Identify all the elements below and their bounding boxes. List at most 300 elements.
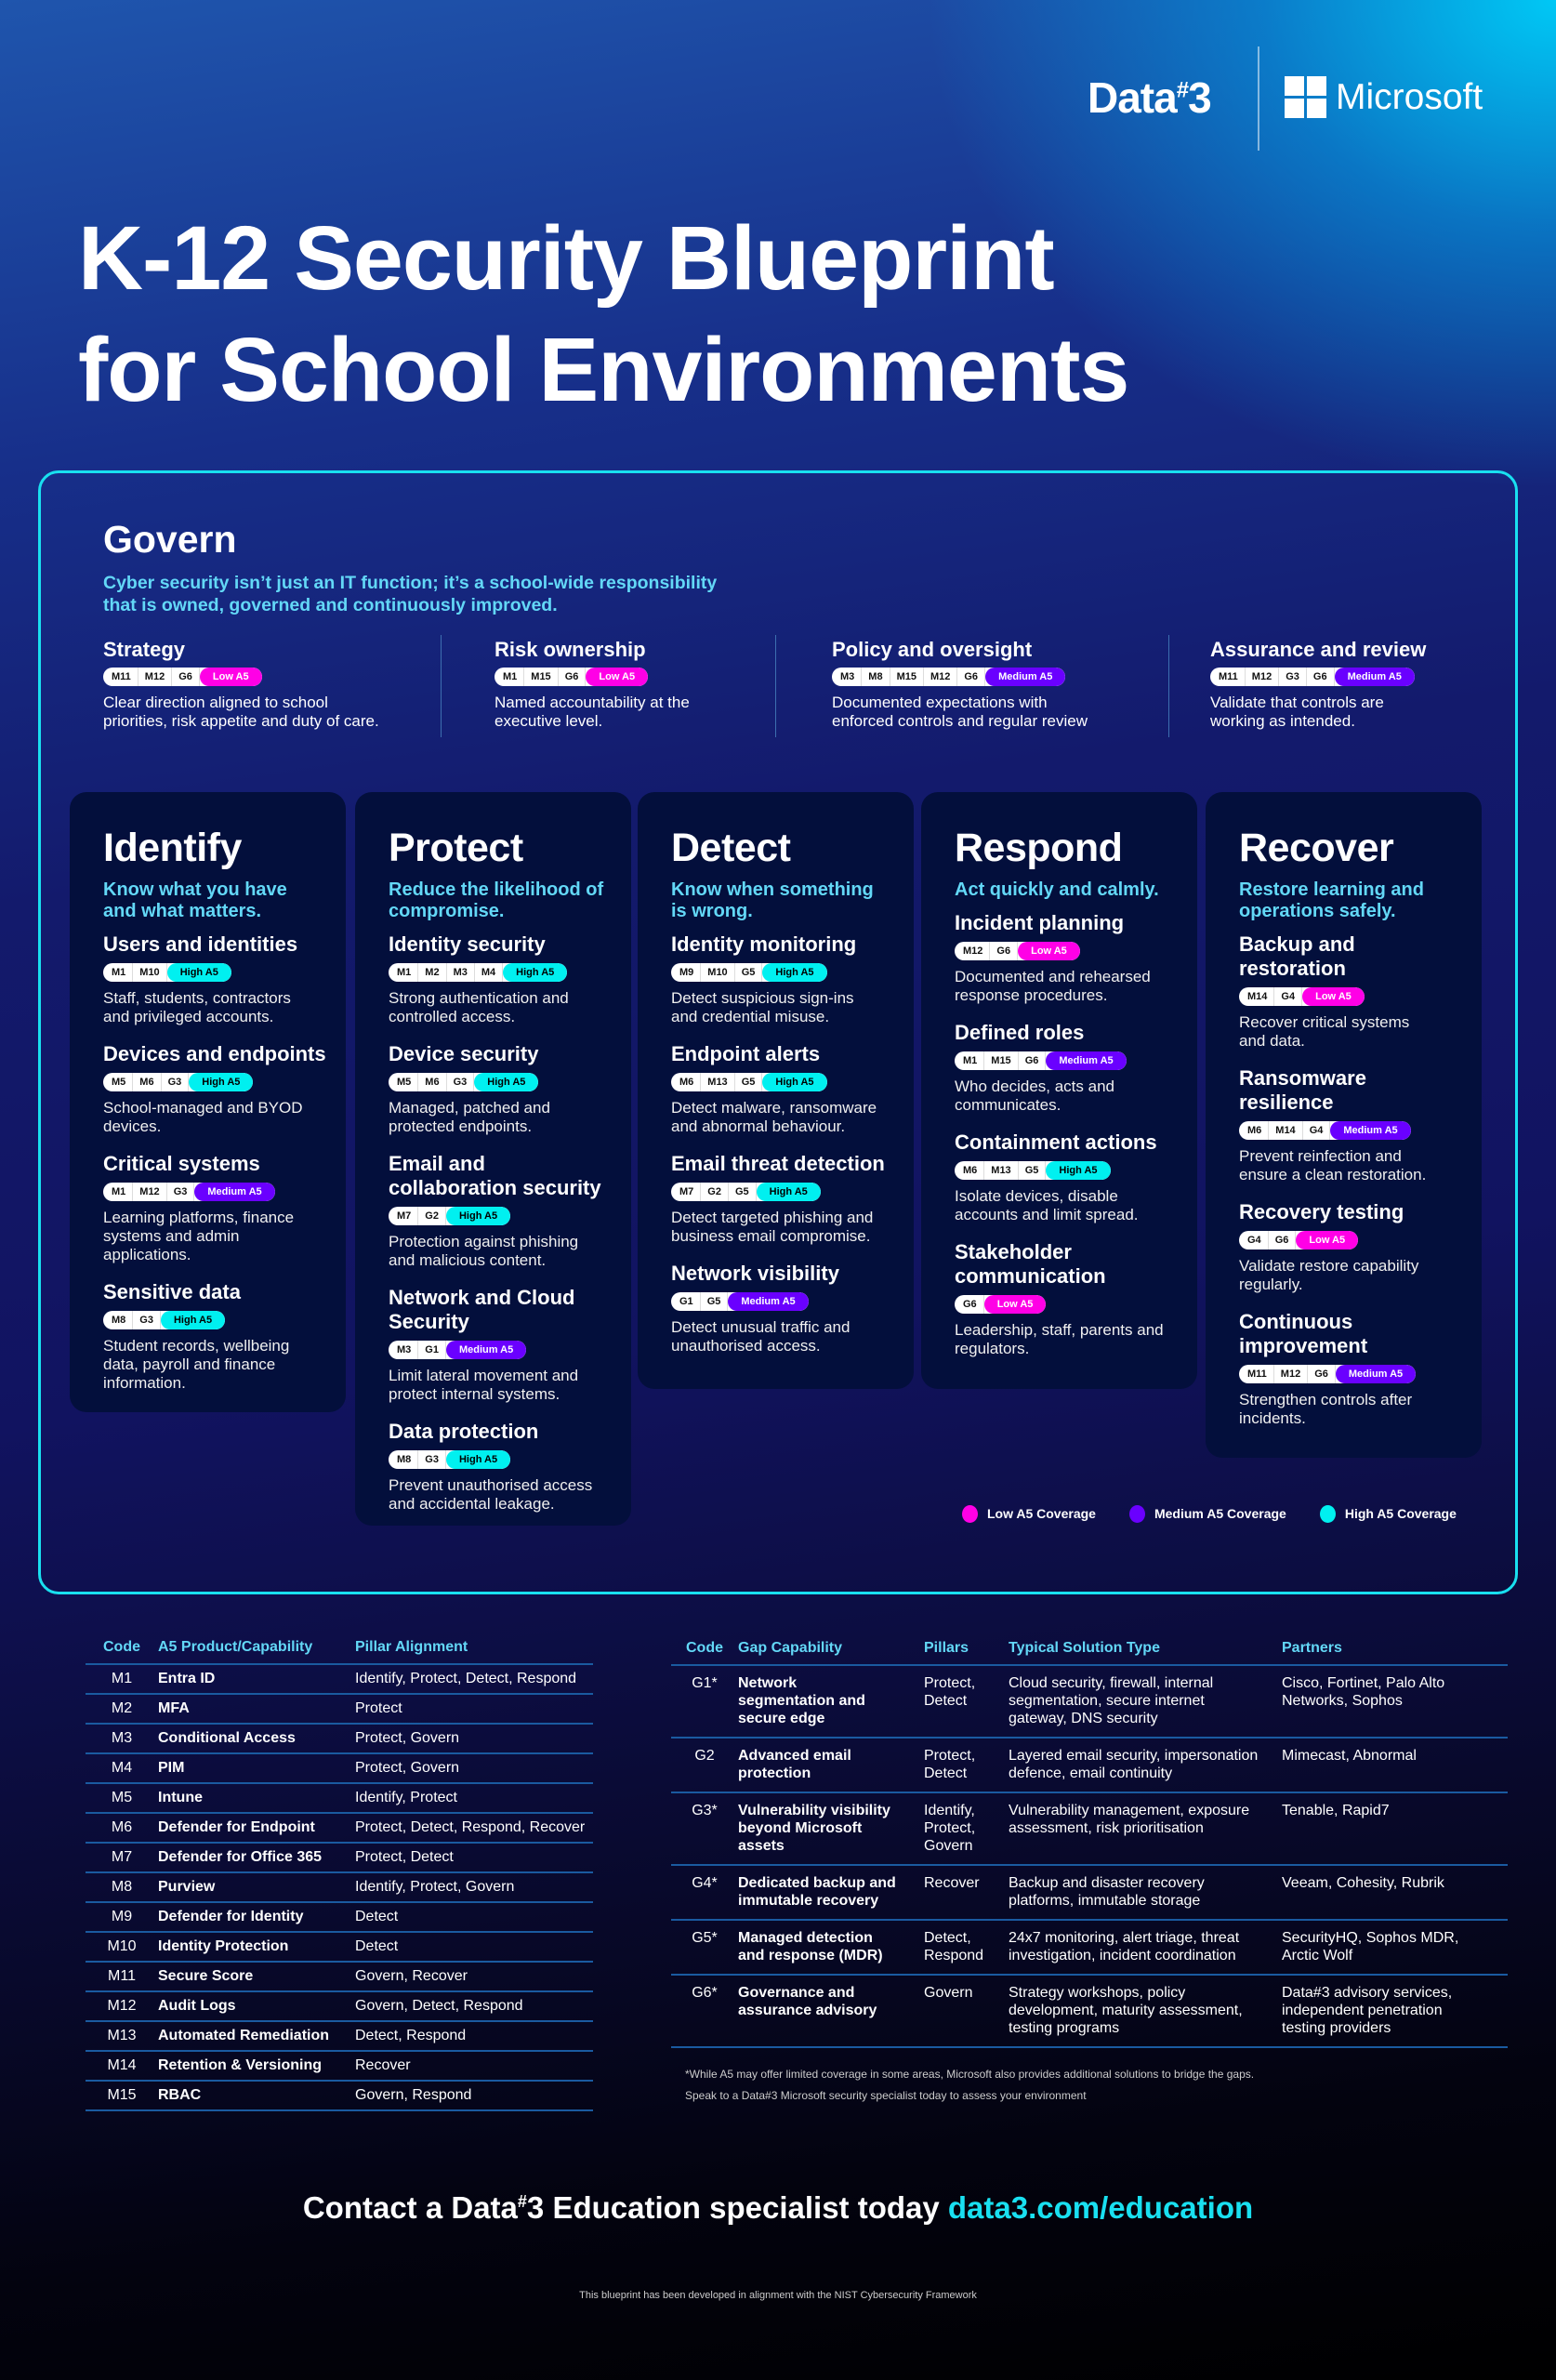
item: Defined roles: M1 [963,1055,977,1066]
item: Data protection: M8 [397,1454,411,1465]
govern item: Assurance and review: G6 [1313,671,1327,682]
item: Identity monitoring: High A5 [775,967,814,978]
item: Email and collaboration security: collaboration security [389,1176,601,1199]
table: gap capabilities: Protect, [924,1675,975,1691]
item: Continuous improvement: Strengthen controls after [1239,1391,1412,1408]
table: A5 products: M12 [107,1998,137,2014]
main panel [38,470,1518,1594]
item: Stakeholder communication: communication [955,1264,1106,1288]
item: Continuous improvement: M11 [1247,1368,1267,1380]
table: gap capabilities: Mimecast, Abnormal [1282,1748,1417,1764]
table: A5 products: Automated Remediation [158,2028,329,2043]
title [78,207,1128,420]
table: gap capabilities: Advanced email [738,1748,851,1764]
item: Email threat detection: G5 [735,1186,749,1197]
item: Data protection: High A5 [459,1454,497,1465]
govern item: Strategy: Strategy [103,638,185,661]
table: gap capabilities: G4* [692,1875,718,1891]
table: A5 products: M11 [108,1968,136,1984]
item: Incident planning [955,911,1151,1004]
item: Stakeholder communication: Low A5 [997,1299,1033,1310]
item: Identity monitoring: Identity monitoring [671,932,856,956]
item: Endpoint alerts: Detect malware, ransomware [671,1099,877,1117]
table: A5 products: M1 [112,1671,132,1686]
item: Containment actions: High A5 [1059,1165,1098,1176]
govern item: Policy and oversight: Documented expectations with [832,694,1048,711]
item: Defined roles [955,1021,1127,1114]
item: Critical systems: M1 [112,1186,125,1197]
table: A5 products: M7 [112,1849,132,1865]
item: Network visibility: Network visibility [671,1262,839,1285]
item: Devices and endpoints: devices. [103,1117,161,1135]
panel: Govern [103,518,718,615]
table: gap capabilities: Gap Capability [738,1640,842,1656]
table: A5 products: Identify, Protect, Govern [355,1879,514,1895]
item: Ransomware resilience: G4 [1310,1125,1323,1136]
item: Containment actions: accounts and limit spread. [955,1206,1138,1223]
item: Incident planning: Documented and rehearsed [955,968,1151,985]
panel: Detect: Know when something [671,879,874,900]
item: Sensitive data: M8 [112,1315,125,1326]
table: gap capabilities: Managed detection [738,1930,873,1946]
table: gap capabilities: Veeam, Cohesity, Rubrik [1282,1875,1444,1891]
table: gap capabilities: independent penetration [1282,2003,1443,2018]
table: A5 products: A5 Product/Capability [158,1639,312,1655]
item: Ransomware resilience: resilience [1239,1091,1334,1114]
footnote: *While A5 may offer limited coverage in some areas, Microsoft also provides additional solutions to bridge the gaps. [685,2068,1254,2081]
table: gap capabilities: testing programs [1009,2020,1119,2036]
panel: Detect [638,792,914,1389]
table: gap capabilities: Tenable, Rapid7 [1282,1803,1390,1818]
item: Users and identities: M10 [139,967,160,978]
item: Defined roles: Who decides, acts and [955,1078,1114,1095]
govern item: Assurance and review: Validate that controls are [1210,694,1384,711]
item: Network and Cloud Security: Network and Cloud [389,1286,574,1309]
item: Network and Cloud Security: Limit lateral movement and [389,1367,578,1384]
item: Email and collaboration security: M7 [397,1210,411,1222]
item: Backup and restoration: Backup and [1239,932,1355,956]
govern item: Strategy: M11 [112,671,131,682]
panel: Identify [70,792,346,1412]
item: Identity security: High A5 [516,967,554,978]
heading: Govern: Govern [103,518,237,561]
govern item: Assurance and review [1210,638,1426,730]
table: gap capabilities: Data#3 advisory services, [1282,1985,1452,2001]
item: Backup and restoration [1239,932,1409,1050]
table: gap capabilities: Governance and [738,1985,854,2001]
item: Continuous improvement [1239,1310,1416,1427]
item: Users and identities: and privileged accounts. [103,1008,273,1025]
item: Devices and endpoints: School-managed and BYOD [103,1099,303,1117]
govern item: Risk ownership: M15 [531,671,551,682]
item: Defined roles: M15 [991,1055,1011,1066]
table: gap capabilities: Code [686,1640,723,1656]
item: Continuous improvement: G6 [1314,1368,1328,1380]
item: Data protection: Data protection [389,1420,538,1443]
table: A5 products: Identity Protection [158,1938,288,1954]
item: Ransomware resilience [1239,1066,1426,1183]
item: Device security: M6 [425,1077,440,1088]
govern item: Strategy: Clear direction aligned to school [103,694,328,711]
table: gap capabilities: G3* [692,1803,718,1818]
table: A5 products: MFA [158,1700,190,1716]
panel: Protect [355,792,631,1526]
table: A5 products: Purview [158,1879,215,1895]
item: Users and identities: Users and identities [103,932,297,956]
table: A5 products: Conditional Access [158,1730,296,1746]
item: Identity monitoring: Detect suspicious sign-ins [671,989,854,1007]
item: Email threat detection: Detect targeted phishing and [671,1209,873,1226]
item: Recovery testing: Recovery testing [1239,1200,1404,1223]
item: Recovery testing [1239,1200,1418,1293]
item: Device security [389,1042,550,1135]
item: Email and collaboration security: and malicious content. [389,1251,546,1269]
item: Ransomware resilience: ensure a clean restoration. [1239,1166,1426,1183]
item: Network visibility: G1 [679,1296,693,1307]
item: Defined roles: Defined roles [955,1021,1084,1044]
table: gap capabilities: Govern [924,1838,972,1854]
item: Incident planning: Low A5 [1031,945,1067,957]
item: Critical systems: systems and admin [103,1227,239,1245]
item: Email and collaboration security: High A5 [459,1210,497,1222]
table: gap capabilities: Pillars [924,1640,969,1656]
table: gap capabilities: segmentation, secure internet [1009,1693,1205,1709]
table: A5 products: M14 [107,2057,137,2073]
item: Device security: protected endpoints. [389,1117,532,1135]
table: gap capabilities: Vulnerability management, exposure [1009,1803,1249,1818]
govern item: Assurance and review: M11 [1219,671,1238,682]
table: gap capabilities: Govern [924,1985,972,2001]
item: Sensitive data: information. [103,1374,186,1392]
table: gap capabilities: protection [738,1765,811,1781]
item: Defined roles: Medium A5 [1059,1055,1114,1066]
table: gap capabilities: Arctic Wolf [1282,1948,1352,1964]
item: Critical systems: Critical systems [103,1152,260,1175]
table: gap capabilities: Network [738,1675,797,1691]
item: Stakeholder communication [955,1240,1164,1357]
item: Containment actions: G5 [1025,1165,1038,1176]
table: gap capabilities: Vulnerability visibility [738,1803,890,1818]
item: Email threat detection [671,1152,885,1245]
item: Devices and endpoints: M6 [139,1077,154,1088]
table: gap capabilities: Recover [924,1875,980,1891]
logo text: Data#3: Data#3 [1088,73,1211,122]
govern item: Assurance and review: Assurance and review [1210,638,1426,661]
govern item: Policy and oversight: Medium A5 [998,671,1052,682]
item: Network and Cloud Security: M3 [397,1344,411,1355]
item: Recovery testing: Validate restore capability [1239,1257,1418,1275]
panel: Identify: and what matters. [103,901,261,921]
govern item: Policy and oversight: M8 [868,671,883,682]
govern item: Risk ownership: Low A5 [599,671,635,682]
item: Stakeholder communication: Leadership, staff, parents and [955,1321,1164,1339]
table: A5 products: M13 [107,2028,137,2043]
table: A5 products: Pillar Alignment [355,1639,468,1655]
table: gap capabilities: Typical Solution Type [1009,1640,1160,1656]
item: Critical systems: M12 [139,1186,160,1197]
govern item: Risk ownership: Named accountability at the [494,694,690,711]
legend: Medium A5 Coverage [1154,1506,1286,1521]
item: Identity security: M1 [397,967,411,978]
table: A5 products: Code [103,1639,140,1655]
table: gap capabilities: Layered email security, impersonation [1009,1748,1258,1764]
item: Identity security [389,932,569,1025]
item: Data protection: and accidental leakage. [389,1495,555,1513]
panel: Respond: Respond [955,826,1122,870]
table: A5 products: Defender for Office 365 [158,1849,322,1865]
table: A5 products: Entra ID [158,1671,215,1686]
item: Backup and restoration: M14 [1247,991,1267,1002]
item: Critical systems: G3 [174,1186,187,1197]
panel: Recover: Restore learning and [1239,879,1424,900]
table: A5 products: M10 [107,1938,137,1954]
item: Ransomware resilience: Prevent reinfection and [1239,1147,1402,1165]
item: Containment actions: Isolate devices, disable [955,1187,1118,1205]
item: Data protection: Prevent unauthorised access [389,1476,592,1494]
table: A5 products: Detect [355,1938,398,1954]
item: Network visibility [671,1262,850,1355]
table: A5 products: Protect, Govern [355,1760,459,1776]
item: Critical systems: Medium A5 [207,1186,262,1197]
item: Network visibility: Medium A5 [741,1296,796,1307]
table: gap capabilities: Detect [924,1765,967,1781]
item: Users and identities: Staff, students, contractors [103,989,291,1007]
govern item: Policy and oversight: G6 [964,671,978,682]
item: Defined roles: G6 [1025,1055,1038,1066]
table: gap capabilities: assurance advisory [738,2003,877,2018]
item: Containment actions: M13 [991,1165,1011,1176]
item: Data protection: G3 [425,1454,439,1465]
item: Endpoint alerts: and abnormal behaviour. [671,1117,845,1135]
govern item: Policy and oversight [832,638,1088,730]
govern item: Assurance and review: G3 [1286,671,1299,682]
item: Network visibility: G5 [707,1296,720,1307]
govern item: Strategy: G6 [178,671,192,682]
item: Device security: Managed, patched and [389,1099,550,1117]
title: for School Environments [78,319,1128,420]
govern item: Policy and oversight: Policy and oversight [832,638,1032,661]
table: A5 products: RBAC [158,2087,201,2103]
table: gap capabilities: assessment, risk prioritisation [1009,1820,1204,1836]
logo: Data#3 and Microsoft [1088,46,1483,151]
panel: Recover: Recover [1239,826,1393,870]
table: gap capabilities: Detect [924,1693,967,1709]
table: A5 products: Recover [355,2057,411,2073]
table: gap capabilities: platforms, immutable storage [1009,1893,1200,1909]
item: Containment actions: Containment actions [955,1130,1157,1154]
item: Ransomware resilience: Medium A5 [1343,1125,1398,1136]
item: Devices and endpoints: G3 [168,1077,181,1088]
table: A5 products: M2 [112,1700,132,1716]
table: A5 products: Detect, Respond [355,2028,466,2043]
item: Endpoint alerts [671,1042,877,1135]
item: Backup and restoration: Recover critical systems [1239,1013,1409,1031]
item: Network and Cloud Security: protect internal systems. [389,1385,560,1403]
item: Devices and endpoints: M5 [112,1077,125,1088]
table: A5 products: M6 [112,1819,132,1835]
panel: Protect: Protect [389,826,523,870]
subtitle: that is owned, governed and continuously improved. [103,595,558,615]
item: Email threat detection: G2 [707,1186,721,1197]
panel: Detect: Detect [671,826,790,870]
logo text: Microsoft: Microsoft [1336,77,1483,117]
item: Email and collaboration security: Email and [389,1152,485,1175]
item: Continuous improvement: Continuous [1239,1310,1352,1333]
item: Continuous improvement: incidents. [1239,1409,1306,1427]
table: gap capabilities: assets [738,1838,785,1854]
govern item: Strategy: priorities, risk appetite and duty of care. [103,712,379,730]
panel: Respond: Act quickly and calmly. [955,879,1159,900]
item: Device security: High A5 [487,1077,525,1088]
item: Users and identities: M1 [112,967,125,978]
item: Recovery testing: Low A5 [1309,1235,1345,1246]
item: Backup and restoration: restoration [1239,957,1346,980]
item: Endpoint alerts: Endpoint alerts [671,1042,820,1065]
item: Incident planning: M12 [963,945,982,957]
table: gap capabilities: gateway, DNS security [1009,1711,1158,1726]
table: A5 products [86,1639,593,2111]
table: gap capabilities: G6* [692,1985,718,2001]
table: gap capabilities: G5* [692,1930,718,1946]
item: Incident planning: G6 [996,945,1010,957]
govern item: Risk ownership [494,638,690,730]
item: Critical systems: Learning platforms, finance [103,1209,294,1226]
item: Email threat detection: M7 [679,1186,693,1197]
item: Identity monitoring: M10 [707,967,728,978]
table: gap capabilities: G1* [692,1675,718,1691]
table: A5 products: Protect, Govern [355,1730,459,1746]
table: gap capabilities: Networks, Sophos [1282,1693,1403,1709]
title: K-12 Security Blueprint [78,207,1054,309]
item: Identity security: Strong authentication and [389,989,569,1007]
subtitle: Cyber security isn’t just an IT function; it’s a school-wide responsibility [103,573,717,593]
table: gap capabilities: investigation, incident coordination [1009,1948,1236,1964]
item: Network and Cloud Security: Security [389,1310,469,1333]
table: A5 products: M15 [107,2087,137,2103]
table: A5 products: Defender for Endpoint [158,1819,315,1835]
govern item: Strategy: M12 [145,671,165,682]
item: Backup and restoration: G4 [1281,991,1295,1002]
item: Devices and endpoints: High A5 [202,1077,240,1088]
item: Devices and endpoints: Devices and endpoints [103,1042,326,1065]
item: Endpoint alerts: M6 [679,1077,693,1088]
govern item: Assurance and review: Medium A5 [1348,671,1402,682]
table: gap capabilities: Dedicated backup and [738,1875,896,1891]
item: Sensitive data: Sensitive data [103,1280,241,1303]
table: A5 products: PIM [158,1760,184,1776]
footnote: Speak to a Data#3 Microsoft security specialist today to assess your environment [685,2089,1087,2102]
panel: Protect: Reduce the likelihood of [389,879,603,900]
table: gap capabilities: Cloud security, firewall, internal [1009,1675,1213,1691]
item: Endpoint alerts: M13 [707,1077,728,1088]
item: Email and collaboration security: G2 [425,1210,439,1222]
legend: Low A5 Coverage [987,1506,1096,1521]
item: Containment actions: M6 [963,1165,977,1176]
item: Identity security: Identity security [389,932,546,956]
table: gap capabilities: testing providers [1282,2020,1391,2036]
table: gap capabilities: segmentation and [738,1693,865,1709]
table: A5 products: Intune [158,1790,203,1805]
item: Recovery testing: G4 [1247,1235,1261,1246]
table: gap capabilities: Protect, [924,1748,975,1764]
item: Device security: G3 [454,1077,467,1088]
item: Stakeholder communication: G6 [963,1299,977,1310]
item: Network and Cloud Security: Medium A5 [459,1344,513,1355]
table: gap capabilities: Backup and disaster recovery [1009,1875,1205,1891]
item: Data protection [389,1420,592,1513]
govern item: Assurance and review: working as intended. [1210,712,1355,730]
item: Device security: M5 [397,1077,411,1088]
table: gap capabilities: Identify, [924,1803,975,1818]
item: Sensitive data: Student records, wellbeing [103,1337,289,1355]
item: Incident planning: Incident planning [955,911,1124,934]
item: Recovery testing: G6 [1275,1235,1288,1246]
item: Backup and restoration: and data. [1239,1032,1305,1050]
panel: Identify: Identify [103,826,242,870]
table: gap capabilities: Partners [1282,1640,1342,1656]
table: A5 products: Govern, Respond [355,2087,471,2103]
panel: Respond [921,792,1197,1389]
table: gap capabilities: development, maturity assessment, [1009,2003,1243,2018]
table: A5 products: Defender for Identity [158,1909,303,1924]
legend [962,1505,1457,1523]
item: Identity security: M3 [454,967,468,978]
table: gap capabilities: Protect, [924,1820,975,1836]
item: Continuous improvement: Medium A5 [1349,1368,1403,1380]
govern item: Strategy: Low A5 [213,671,249,682]
table: gap capabilities: Respond [924,1948,983,1964]
item: Email and collaboration security [389,1152,601,1269]
table: A5 products: M8 [112,1879,132,1895]
govern item: Risk ownership: M1 [503,671,517,682]
table: A5 products: M9 [112,1909,132,1924]
table: gap capabilities: Strategy workshops, policy [1009,1985,1185,2001]
table: gap capabilities: secure edge [738,1711,824,1726]
item: Network visibility: Detect unusual traffic and [671,1318,850,1336]
item: Devices and endpoints [103,1042,326,1135]
table: A5 products: Govern, Recover [355,1968,468,1984]
bottom note: This blueprint has been developed in alignment with the NIST Cybersecurity Framework [579,2290,977,2301]
panel: Recover [1206,792,1482,1458]
item: Sensitive data [103,1280,289,1392]
item: Network and Cloud Security: G1 [425,1344,439,1355]
table: gap capabilities: 24x7 monitoring, alert triage, threat [1009,1930,1239,1946]
table: gap capabilities: defence, email continuity [1009,1765,1172,1781]
govern item: Policy and oversight: M3 [840,671,854,682]
item: Email and collaboration security: Protection against phishing [389,1233,578,1250]
table: A5 products: Secure Score [158,1968,253,1984]
item: Endpoint alerts: High A5 [775,1077,814,1088]
subtitle [103,573,718,615]
item: Critical systems: applications. [103,1246,191,1263]
govern item: Policy and oversight: M12 [930,671,950,682]
table: gap capabilities: immutable recovery [738,1893,878,1909]
govern item: Risk ownership: executive level. [494,712,602,730]
item: Sensitive data: data, payroll and finance [103,1355,275,1373]
table: gap capabilities [671,1640,1508,2048]
table: gap capabilities: G2 [694,1748,715,1764]
govern item: Policy and oversight: M15 [897,671,916,682]
item: Incident planning: response procedures. [955,986,1107,1004]
item: Sensitive data: G3 [139,1315,153,1326]
item: Recovery testing: regularly. [1239,1276,1303,1293]
item: Identity monitoring: G5 [742,967,755,978]
item: Containment actions [955,1130,1157,1223]
item: Identity security: M4 [481,967,495,978]
table: gap capabilities: beyond Microsoft [738,1820,862,1836]
item: Sensitive data: High A5 [174,1315,212,1326]
item: Identity monitoring: M9 [679,967,693,978]
